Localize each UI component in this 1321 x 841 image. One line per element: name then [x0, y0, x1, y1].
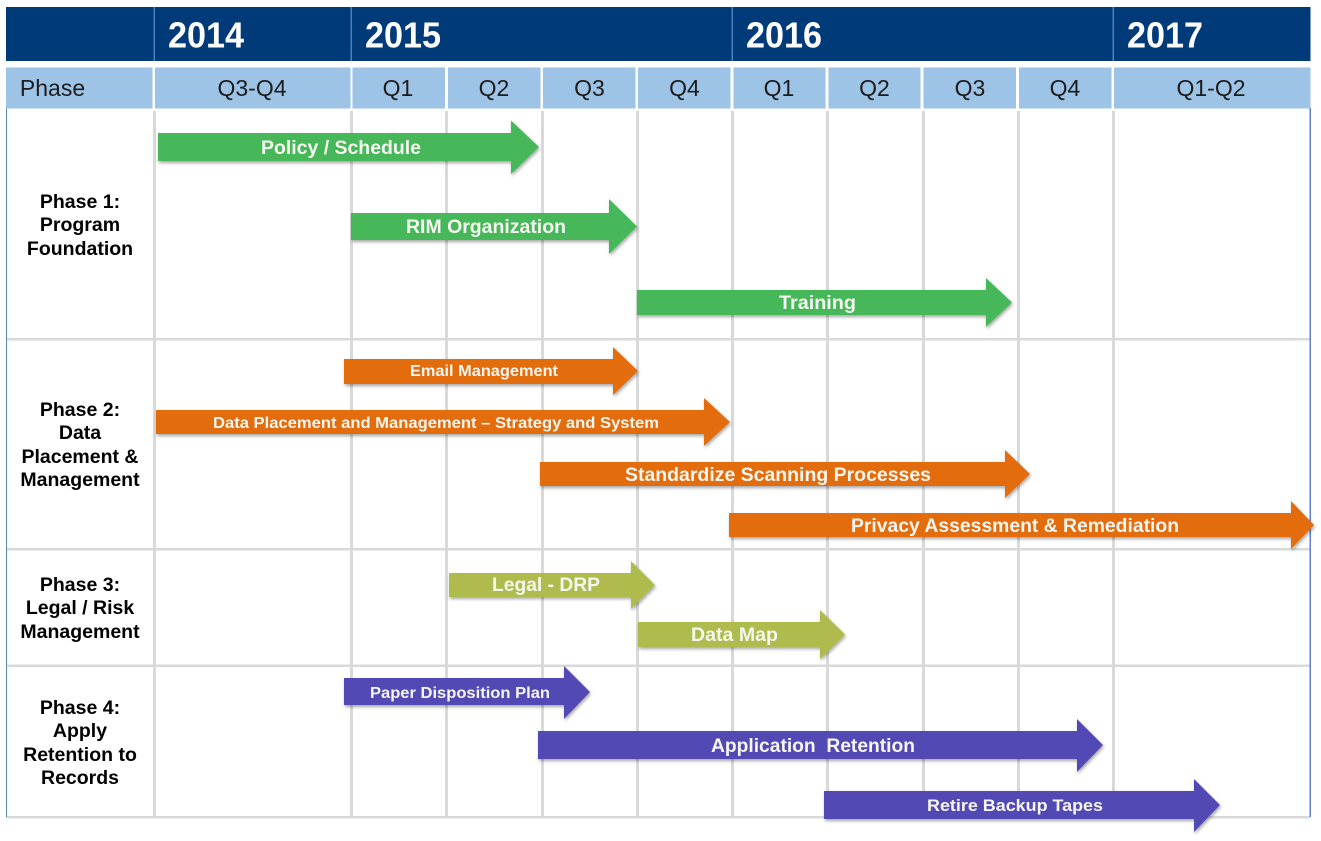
- quarter header row: Q4: [669, 75, 700, 101]
- arrow: Retire Backup Tapes: [824, 779, 1220, 832]
- quarter header row: Q4: [1050, 75, 1081, 101]
- arrow: Standardize Scanning Processes: Standardize Scanning Processes: [625, 465, 931, 486]
- quarter header row: Q1: [383, 75, 413, 101]
- quarter header row: Q1-Q2: [1176, 75, 1246, 101]
- year header band: [6, 7, 1310, 61]
- arrow: Application Retention: Application Retention: [711, 736, 915, 757]
- year header band: 2014: [168, 14, 244, 56]
- phase 3 label: Management: [20, 621, 140, 643]
- arrow: Privacy Assessment & Remediation: [729, 501, 1314, 549]
- phase 1 label: Program: [40, 214, 120, 236]
- arrow: Legal - DRP: [449, 561, 655, 609]
- phase 1 label: Phase 1:: [40, 191, 120, 213]
- year header band: 2017: [1127, 14, 1203, 56]
- arrow: Data Map: [638, 610, 845, 659]
- quarter header row: [6, 68, 1310, 108]
- phase 2 label: Data: [59, 422, 101, 444]
- arrow: Training: Training: [779, 292, 856, 314]
- arrow: Standardize Scanning Processes: [540, 450, 1030, 498]
- arrow: Privacy Assessment & Remediation: Privacy Assessment & Remediation: [851, 516, 1179, 537]
- phase 4 label: Records: [41, 767, 119, 789]
- phase 3 label: Phase 3:: [40, 574, 120, 596]
- arrow: Data Placement and Management: Data Placement and Management – Strategy and System: [213, 415, 659, 432]
- quarter header row: Q3: [574, 75, 605, 101]
- phase 1 label: Foundation: [27, 238, 133, 260]
- quarter header row: Q2: [479, 75, 509, 101]
- phase 4 label: Apply: [53, 720, 107, 742]
- quarter header row: Phase: [20, 75, 85, 101]
- quarter header row: Q2: [859, 75, 890, 101]
- phase 3 label: Legal / Risk: [26, 597, 134, 619]
- arrow: RIM Organization: [351, 199, 637, 254]
- phase 4 label: Retention to: [23, 744, 137, 766]
- phase 2 label: Phase 2:: [40, 399, 120, 421]
- arrow: Legal - DRP: Legal - DRP: [492, 575, 600, 596]
- phase 2 label: Placement &: [21, 446, 139, 468]
- quarter header row: Q3-Q4: [217, 75, 287, 101]
- quarter header row: Q3: [955, 75, 985, 101]
- arrow: Application Retention: [538, 719, 1103, 772]
- phase 2 label: Management: [20, 469, 140, 491]
- arrow: Email Management: [344, 347, 638, 395]
- arrow: Paper Disposition Plan: [344, 666, 590, 719]
- year header band: 2016: [746, 14, 822, 56]
- arrow: RIM Organization: RIM Organization: [406, 216, 566, 238]
- arrow: Policy / Schedule: Policy / Schedule: [261, 137, 421, 159]
- year header band: 2015: [365, 14, 441, 56]
- phase 4 label: Phase 4:: [40, 697, 120, 719]
- arrow: Paper Disposition Plan: Paper Disposition Plan: [370, 685, 550, 702]
- arrow: Retire Backup Tapes: Retire Backup Tapes: [927, 796, 1103, 815]
- arrow: Email Management: Email Management: [410, 363, 559, 380]
- quarter header row: Q1: [764, 75, 794, 101]
- arrow: Training: [637, 278, 1012, 327]
- arrow: Data Map: Data Map: [691, 625, 778, 646]
- arrow: Policy / Schedule: [158, 120, 539, 174]
- arrow: Data Placement and Management: [156, 398, 730, 446]
